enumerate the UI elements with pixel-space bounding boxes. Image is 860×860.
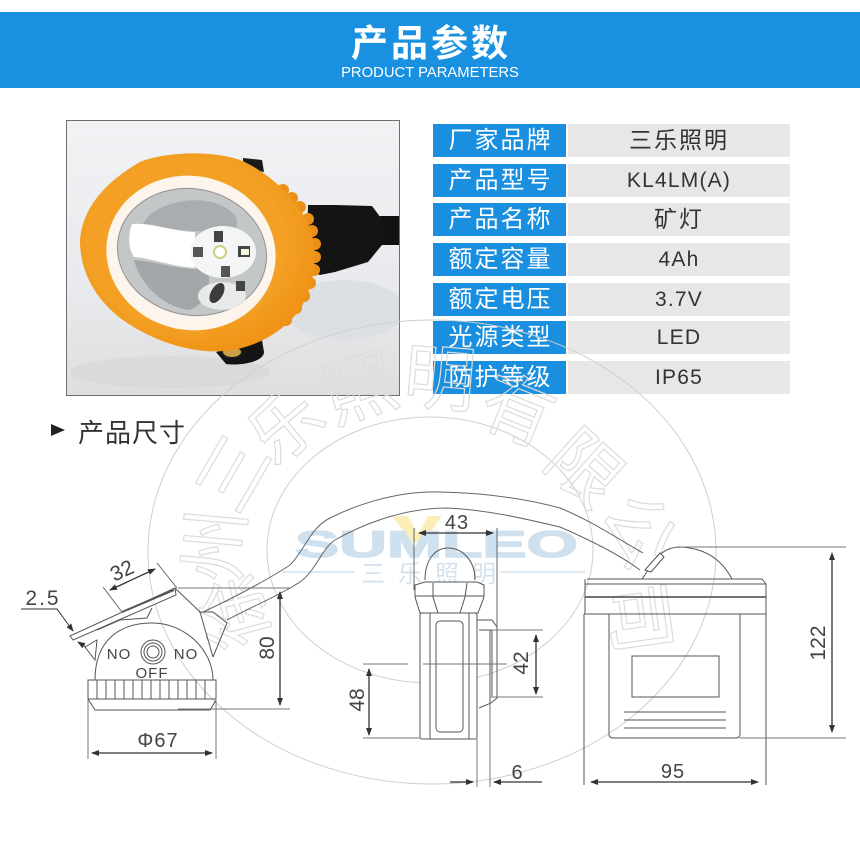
row: protection	[433, 361, 790, 394]
row: voltage	[433, 283, 790, 316]
dimension: 2.5: 2.5	[25, 587, 61, 610]
dimension: 2.5	[21, 587, 86, 647]
row: name: 矿灯	[654, 206, 704, 232]
row: voltage: 额定电压	[448, 286, 552, 313]
switch labels: NO	[174, 646, 198, 663]
watermark: SUMLEO logo: SUMLEO	[295, 524, 578, 565]
row: protection: IP65	[655, 366, 703, 389]
dimension: 43	[414, 512, 497, 627]
dimension: 6	[450, 703, 542, 787]
row: light source: 光源类型	[448, 324, 552, 351]
switch labels: OFF	[136, 665, 168, 682]
watermark: company seal: 照	[314, 341, 407, 439]
section heading: product dimensions	[51, 418, 186, 448]
row: protection: 防护等级	[448, 364, 552, 391]
title: 产品参数	[351, 23, 511, 64]
dimension: 32: 32	[107, 556, 138, 586]
dimension: 32	[103, 556, 177, 612]
row: light source	[433, 321, 790, 354]
dimension: 43: 43	[445, 512, 469, 534]
row: name	[433, 203, 790, 236]
heading text: 产品尺寸	[78, 418, 186, 448]
dimension: diameter 67	[88, 700, 216, 759]
dimension: 48	[346, 664, 507, 738]
watermark: SUMLEO logo: 三乐照明	[361, 561, 496, 588]
dimension: 122: 122	[807, 625, 830, 661]
dimension: 122	[680, 547, 846, 738]
dimension: 80	[178, 588, 290, 709]
product photo: orange miner's lamp	[66, 120, 400, 396]
cable connecting lamp and battery	[203, 492, 643, 620]
parameter table	[433, 124, 790, 394]
row: brand	[433, 124, 790, 157]
row: light source: LED	[657, 326, 701, 349]
switch labels	[107, 646, 198, 682]
dimension: 48: 48	[346, 688, 369, 712]
dimension: 42: 42	[510, 651, 533, 675]
dimension: 42	[493, 630, 543, 697]
dimension: 95: 95	[661, 761, 685, 783]
watermark: company seal	[148, 320, 716, 784]
watermark: company seal: 乐	[233, 373, 340, 480]
drawing: left view of lamp head	[70, 588, 227, 710]
row: capacity: 4Ah	[659, 248, 699, 271]
drawing: side view	[415, 548, 497, 739]
drawing: battery case front view	[584, 547, 766, 785]
row: model	[433, 164, 790, 197]
dimension: 6: 6	[511, 762, 523, 784]
watermark: company seal: 州	[174, 506, 260, 585]
subtitle: PRODUCT PARAMETERS	[341, 65, 519, 81]
switch labels: NO	[107, 646, 131, 663]
row: model: KL4LM(A)	[627, 169, 731, 192]
dimension: 80: 80	[256, 636, 279, 660]
watermark: SUMLEO logo	[282, 516, 585, 588]
dimension: diameter 67: Φ67	[137, 730, 179, 752]
row: capacity: 额定容量	[448, 246, 552, 273]
watermark: company seal: 三	[182, 423, 287, 525]
row: voltage: 3.7V	[655, 288, 703, 311]
row: model: 产品型号	[448, 167, 552, 194]
header banner	[0, 12, 860, 88]
icon: triangle marker	[51, 424, 65, 436]
watermark: company seal: 明	[400, 337, 479, 423]
row: brand: 三乐照明	[629, 127, 729, 153]
watermark: company seal: 徐	[189, 566, 285, 657]
row: brand: 厂家品牌	[448, 127, 552, 154]
watermark: company seal: 有	[469, 361, 566, 462]
watermark: company seal: 司	[593, 577, 683, 660]
row: name: 产品名称	[448, 206, 552, 233]
watermark: company seal: 公	[586, 480, 690, 582]
watermark: company seal: 限	[530, 416, 637, 523]
row: capacity	[433, 243, 790, 276]
